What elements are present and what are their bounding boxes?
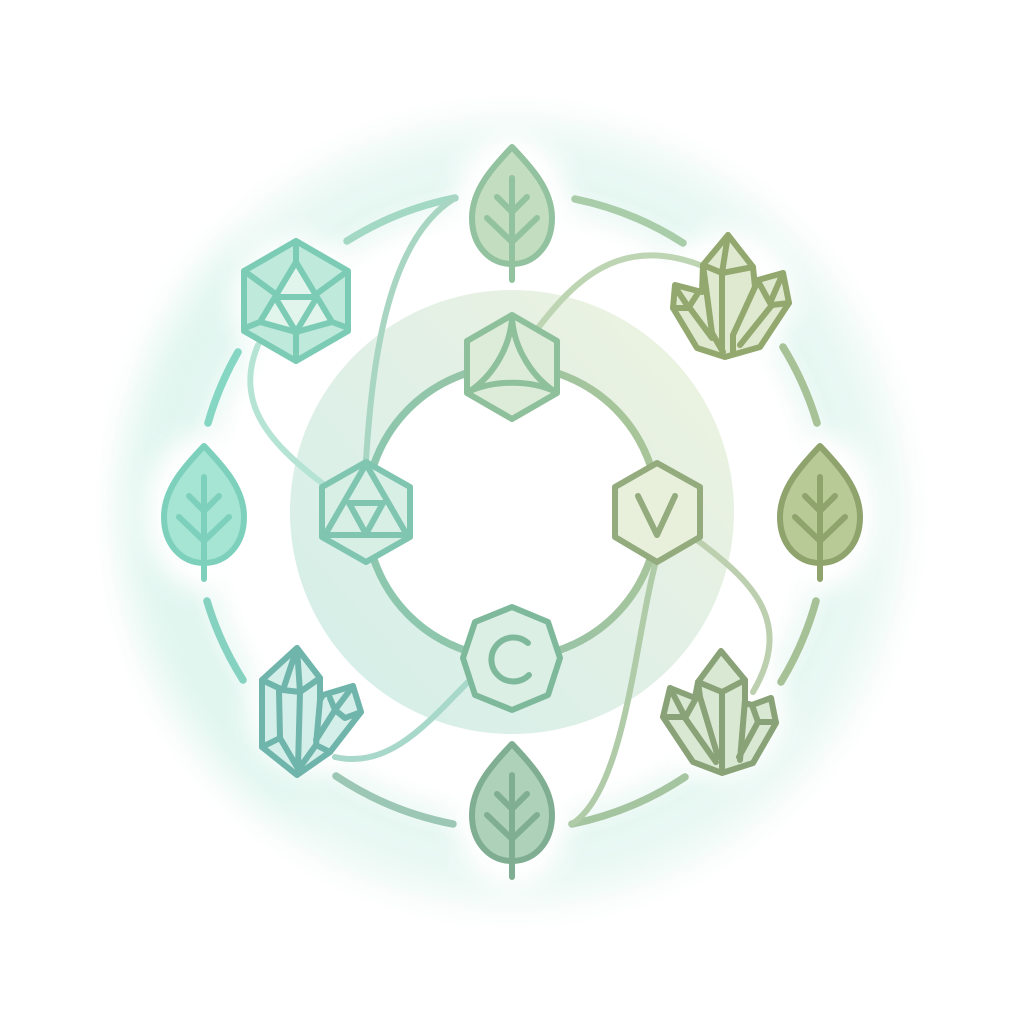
icon: crystal bottom right xyxy=(663,651,776,773)
icon: hexagon left with triangles xyxy=(322,462,410,562)
icon: octagon C xyxy=(463,607,560,710)
inner ring xyxy=(366,366,658,658)
icon: leaf bottom xyxy=(472,744,552,877)
icon: icosahedron top-left xyxy=(244,241,348,361)
icon: leaf top xyxy=(472,147,552,280)
inner disc xyxy=(290,290,734,734)
icon: crystal top right xyxy=(673,235,789,357)
icon: leaf left xyxy=(164,446,244,579)
outer dashed ring xyxy=(207,198,817,824)
icon: hexagon top center xyxy=(467,315,557,419)
icon: hexagon V xyxy=(615,463,700,562)
connector curves xyxy=(250,198,770,824)
icon: leaf right xyxy=(780,446,860,579)
icon: crystal bottom left xyxy=(262,648,361,775)
